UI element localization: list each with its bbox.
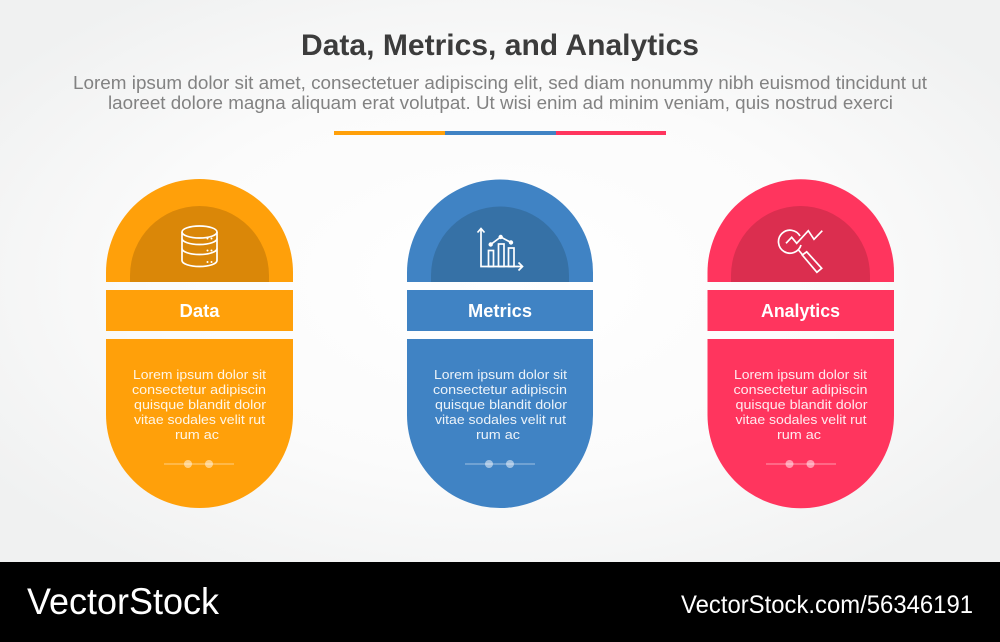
body text: rum ac [777,427,822,442]
body text: Lorem ipsum dolor sit [734,367,867,382]
label: Data: Data [180,301,221,321]
panel: analytics [708,179,894,508]
body text: Lorem ipsum dolor sit [434,367,567,382]
slider ornament [766,460,836,468]
subtitle text: Lorem ipsum dolor sit amet, consectetuer adipiscing elit, sed diam nonummy nibh euismod tincidunt ut [73,72,927,93]
icon: magnifier with trend [778,230,822,272]
body text: consectetur adipiscin [734,382,868,397]
footer url: VectorStock.com/56346191 [681,591,973,619]
inner semicircle [731,206,870,282]
bottom body [708,339,894,508]
label: Metrics: Metrics [468,301,532,321]
body text [734,367,868,442]
body text [132,367,267,442]
body text: Lorem ipsum dolor sit [133,367,266,382]
body text: rum ac [175,427,220,442]
body text [433,367,568,442]
icon: database [182,226,217,266]
panel: metrics [407,180,593,508]
panel: data [106,179,293,508]
icon: bar chart [478,228,522,270]
label bar: Data [106,290,293,331]
body text: quisque blandit dolor [435,397,568,412]
body text: quisque blandit dolor [134,397,267,412]
bottom body [407,339,593,508]
label bar: Analytics [708,290,894,331]
body text: consectetur adipiscin [132,382,266,397]
inner semicircle [130,206,269,282]
subtitle text: laoreet dolore magna aliquam erat volutpat. Ut wisi enim ad minim veniam, quis nostrud exerci [108,92,893,113]
slider ornament [465,460,535,468]
footer bar [0,562,1000,642]
inner semicircle [431,207,569,282]
body text: quisque blandit dolor [736,397,868,412]
body text: consectetur adipiscin [433,382,567,397]
slider ornament [164,460,234,468]
top cap [407,180,593,282]
label bar: Metrics [407,290,593,331]
subtitle text [73,72,927,113]
top cap [106,179,293,282]
label: Analytics: Analytics [761,301,840,321]
top cap [708,179,894,282]
footer logo text: VectorStock [27,581,219,622]
bottom body [106,339,293,508]
body text: vitae sodales velit rut [435,412,566,427]
body text: vitae sodales velit rut [134,412,265,427]
title: Data, Metrics, and Analytics [301,29,699,62]
body text: rum ac [476,427,521,442]
body text: vitae sodales velit rut [736,412,867,427]
tricolor divider [334,131,666,135]
